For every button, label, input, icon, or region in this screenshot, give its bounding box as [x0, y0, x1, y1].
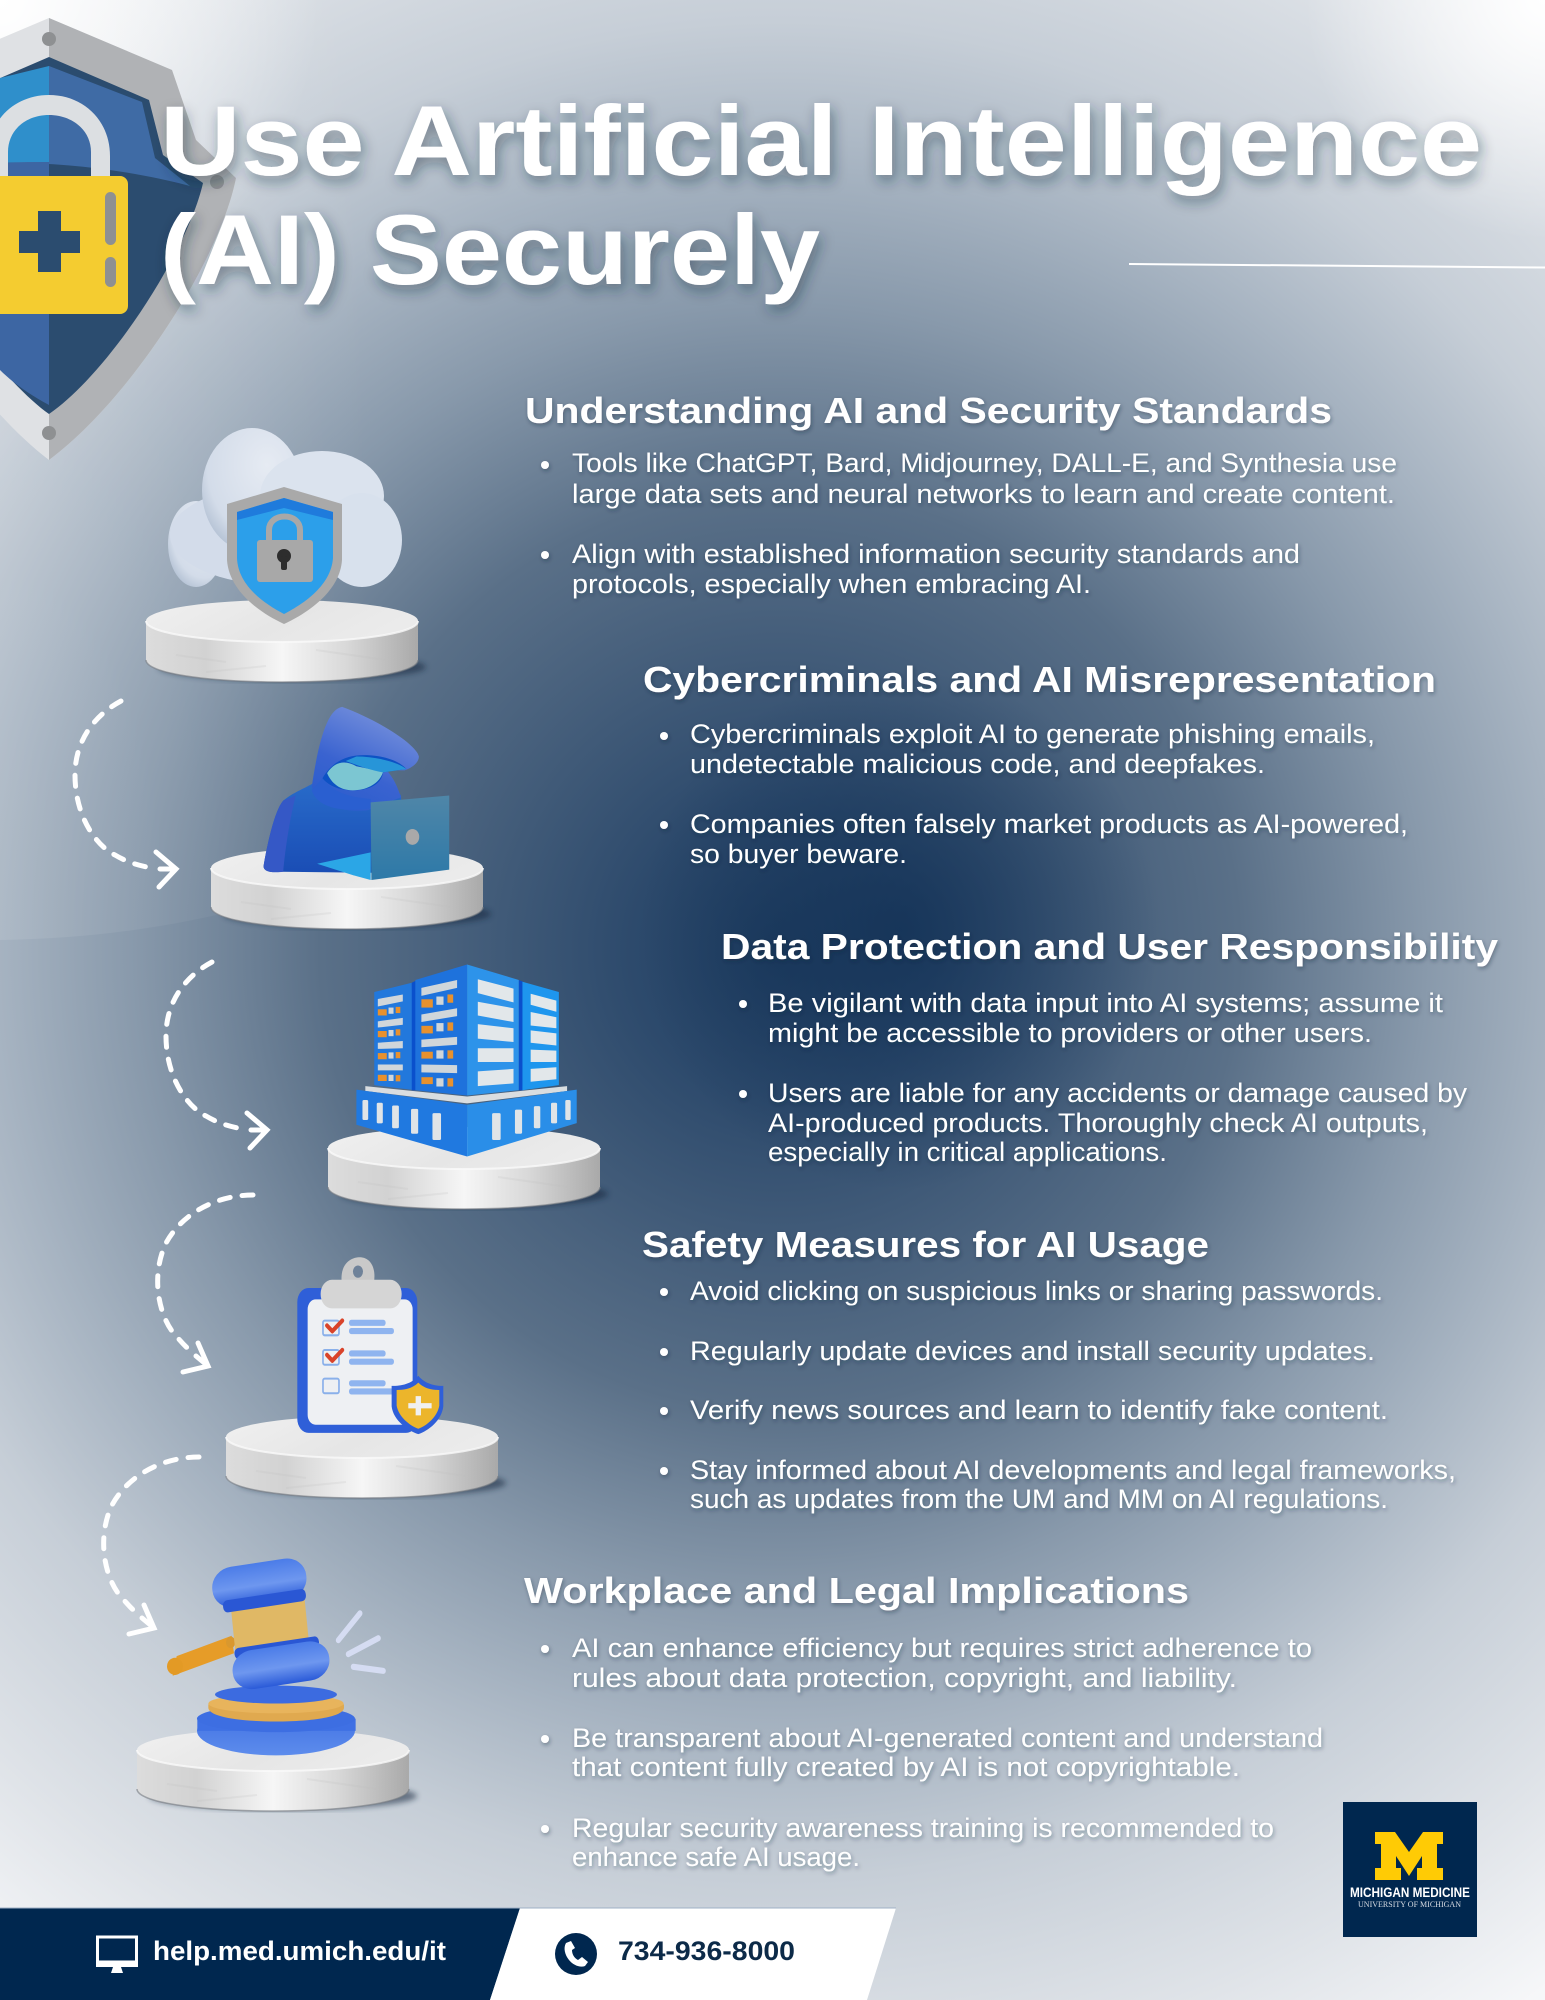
- bullet list: Be transparent about AI-generated content and understand: [572, 1723, 1323, 1753]
- bullet list: Regularly update devices and install security updates.: [690, 1336, 1375, 1366]
- block M: [1375, 1832, 1443, 1880]
- heading: Cybercriminals and AI Misrepresentation: [643, 659, 1436, 700]
- bullet list: [541, 448, 1397, 599]
- bullet list: Avoid clicking on suspicious links or sharing passwords.: [690, 1276, 1383, 1306]
- icon: phone: [555, 1933, 597, 1975]
- section 1: Understanding AI and Security Standards: [525, 390, 1397, 599]
- icon: large shield with padlock: [0, 18, 236, 460]
- logo: Michigan Medicine: [1343, 1802, 1477, 1937]
- icon: computer monitor: [96, 1937, 138, 1973]
- title: [160, 85, 1482, 305]
- bullet list: Companies often falsely market products as AI-powered,: [690, 809, 1408, 839]
- pedestal 3: [328, 1127, 608, 1209]
- bullet list: AI-produced products. Thoroughly check AI outputs,: [768, 1108, 1428, 1138]
- title: (AI) Securely: [160, 194, 820, 305]
- icon: office building: [356, 964, 577, 1157]
- small shield: [227, 487, 342, 624]
- bullet list: especially in critical applications.: [768, 1137, 1167, 1167]
- icon: cloud with shield: [168, 428, 402, 624]
- section 3: Data Protection and User Responsibility: [721, 926, 1498, 1167]
- pedestal 4: [226, 1416, 506, 1498]
- heading: Data Protection and User Responsibility: [721, 926, 1498, 967]
- sub-wordmark: UNIVERSITY OF MICHIGAN: [1358, 1900, 1461, 1909]
- heading: Workplace and Legal Implications: [524, 1570, 1189, 1611]
- padlock body: [0, 176, 128, 314]
- bullet list: AI can enhance efficiency but requires strict adherence to: [572, 1633, 1312, 1663]
- arrow 4: [104, 1457, 199, 1634]
- bullet list: Verify news sources and learn to identify fake content.: [690, 1395, 1388, 1425]
- pedestal 1: [146, 600, 426, 682]
- icon: clipboard checklist with shield: [297, 1257, 443, 1434]
- bullet list: undetectable malicious code, and deepfakes.: [690, 749, 1265, 779]
- heading: Understanding AI and Security Standards: [525, 390, 1332, 431]
- arrow 1: [75, 701, 176, 887]
- bullet list: Stay informed about AI developments and legal frameworks,: [690, 1455, 1456, 1485]
- icon: gavel and sound block: [167, 1553, 383, 1755]
- bullet list: [660, 719, 1408, 869]
- icon: hooded hacker with laptop: [264, 707, 449, 880]
- bullet list: large data sets and neural networks to learn and create content.: [572, 479, 1395, 509]
- title rule: [1129, 264, 1545, 268]
- bullet list: Regular security awareness training is recommended to: [572, 1813, 1274, 1843]
- bullet list: Align with established information security standards and: [572, 539, 1300, 569]
- title: Use Artificial Intelligence: [160, 85, 1482, 196]
- bullet list: so buyer beware.: [690, 839, 907, 869]
- bullet list: Users are liable for any accidents or damage caused by: [768, 1078, 1468, 1108]
- section 2: Cybercriminals and AI Misrepresentation: [643, 659, 1436, 869]
- bullet list: Cybercriminals exploit AI to generate phishing emails,: [690, 719, 1375, 749]
- bullet list: protocols, especially when embracing AI.: [572, 569, 1091, 599]
- plus sign: [19, 211, 80, 272]
- bullet list: such as updates from the UM and MM on AI regulations.: [690, 1484, 1388, 1514]
- bullet list: Be vigilant with data input into AI systems; assume it: [768, 988, 1444, 1018]
- bullet list: enhance safe AI usage.: [572, 1842, 860, 1872]
- heading: Safety Measures for AI Usage: [642, 1224, 1209, 1265]
- bullet list: [739, 988, 1468, 1167]
- section 5: Workplace and Legal Implications: [524, 1570, 1323, 1872]
- bullet list: [541, 1633, 1323, 1872]
- pedestal 5: [137, 1729, 417, 1811]
- phone number: 734-936-8000: [618, 1936, 795, 1966]
- padlock shackle: [0, 95, 110, 176]
- bullet list: Tools like ChatGPT, Bard, Midjourney, DALL-E, and Synthesia use: [572, 448, 1397, 478]
- pedestal 2: [211, 847, 491, 929]
- bullet list: [660, 1276, 1456, 1514]
- website: help.med.umich.edu/it: [153, 1936, 446, 1966]
- bullet list: might be accessible to providers or other users.: [768, 1018, 1372, 1048]
- footer bar: [0, 1908, 896, 2000]
- arrow 2: [166, 962, 267, 1148]
- wordmark: MICHIGAN MEDICINE: [1350, 1884, 1470, 1900]
- bullet list: that content fully created by AI is not copyrightable.: [572, 1752, 1240, 1782]
- bullet list: rules about data protection, copyright, and liability.: [572, 1663, 1237, 1693]
- arrow 3: [158, 1195, 253, 1372]
- section 4: Safety Measures for AI Usage: [642, 1224, 1456, 1514]
